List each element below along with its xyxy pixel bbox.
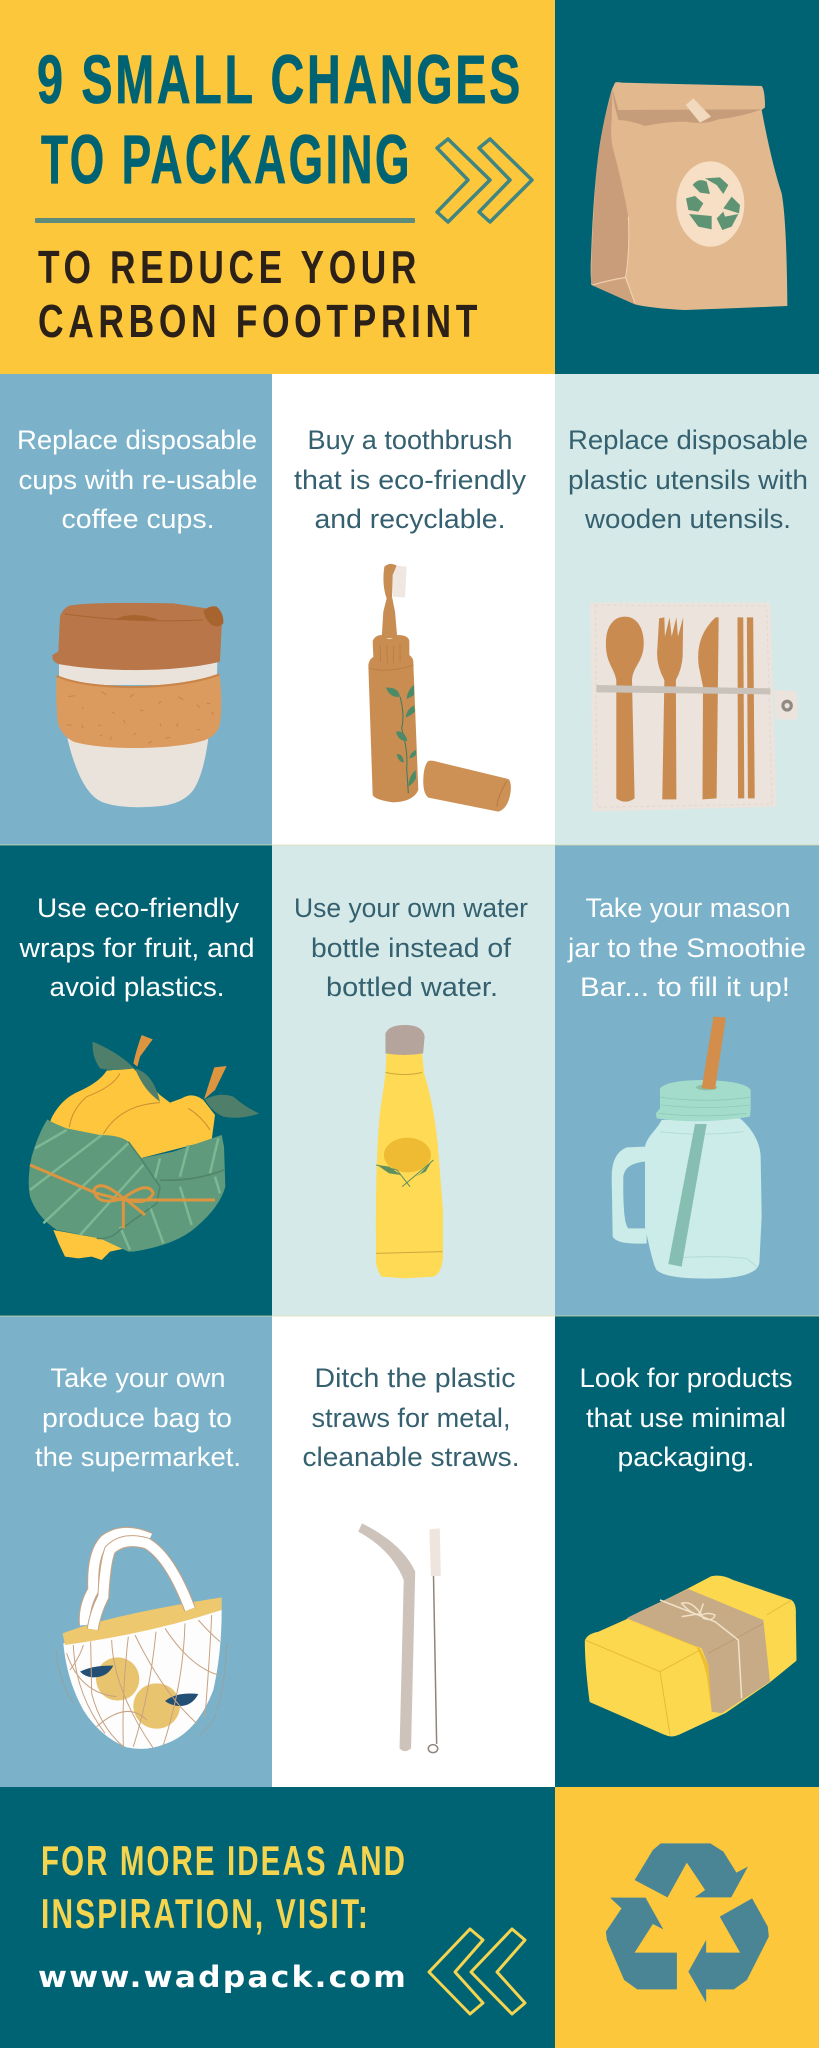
text: bottle instead of bbox=[311, 933, 512, 963]
text: jar: Take your mason bbox=[586, 893, 790, 923]
subtitle: CARBON FOOTPRINT bbox=[38, 295, 482, 347]
title: TO PACKAGING bbox=[41, 121, 412, 198]
text: cups: Replace disposable bbox=[17, 425, 257, 455]
panel: straws bbox=[272, 1316, 555, 1787]
panel: header teal bbox=[555, 0, 819, 374]
panel: produce bag bbox=[0, 1316, 272, 1787]
text: packaging. bbox=[618, 1442, 754, 1472]
text: the supermarket. bbox=[35, 1442, 241, 1472]
text: produce bag to bbox=[42, 1403, 232, 1433]
panel: mason jar bbox=[555, 845, 819, 1316]
footer link: www.wadpack.com bbox=[38, 1960, 408, 1994]
panel: water bottle bbox=[272, 845, 555, 1316]
text: produce bag: Take your own bbox=[50, 1363, 226, 1393]
icon: coffee cup bbox=[52, 603, 223, 807]
text: cups with re-usable bbox=[18, 465, 258, 495]
icon: packaged soap bbox=[585, 1577, 795, 1735]
icon: water bottle bbox=[376, 1025, 443, 1278]
text: minimal packaging: Look for products bbox=[580, 1363, 792, 1393]
icon: metal straw and brush bbox=[358, 1523, 441, 1753]
title rule bbox=[35, 218, 415, 223]
text: wooden utensils. bbox=[584, 504, 791, 534]
icon: wooden utensils bbox=[590, 603, 798, 812]
icon: toothbrush bbox=[368, 564, 511, 812]
icon: paper bag bbox=[591, 82, 787, 310]
footer text: FOR MORE IDEAS AND bbox=[41, 1837, 407, 1884]
text: bottle: Use your own water bbox=[294, 893, 528, 923]
text: straws: Ditch the plastic bbox=[314, 1363, 516, 1393]
arrow: header chevrons bbox=[437, 139, 532, 222]
footer text bbox=[41, 1837, 407, 1937]
subtitle bbox=[38, 241, 482, 347]
panel: minimal packaging bbox=[555, 1316, 819, 1787]
title bbox=[37, 41, 523, 198]
text: wraps for fruit, and bbox=[18, 933, 254, 963]
panel: footer yellow bbox=[555, 1787, 819, 2048]
panel: wraps bbox=[0, 845, 272, 1316]
text: straws for metal, bbox=[312, 1403, 510, 1433]
panel: toothbrush bbox=[272, 374, 555, 845]
panel: cups bbox=[0, 374, 272, 845]
footer text: INSPIRATION, VISIT: bbox=[41, 1890, 370, 1937]
text: wraps: Use eco-friendly bbox=[37, 893, 240, 923]
title: 9 SMALL CHANGES bbox=[37, 41, 523, 118]
text: toothbrush: Buy a toothbrush bbox=[308, 425, 512, 455]
panel: utensils bbox=[555, 374, 819, 845]
text: cleanable straws. bbox=[302, 1442, 520, 1472]
icon: produce net bag bbox=[56, 1533, 227, 1749]
text: that is eco-friendly bbox=[294, 465, 527, 495]
text: Bar... to fill it up! bbox=[580, 972, 790, 1002]
text: jar to the Smoothie bbox=[567, 933, 806, 963]
text: and recyclable. bbox=[314, 504, 506, 534]
text: plastic utensils with bbox=[568, 465, 808, 495]
panel: footer teal bbox=[0, 1787, 555, 2048]
icon: mason jar bbox=[612, 1017, 762, 1279]
text: bottled water. bbox=[326, 972, 498, 1002]
icon: wrapped fruit bbox=[29, 1035, 259, 1260]
text: coffee cups. bbox=[62, 504, 214, 534]
arrow: footer chevrons bbox=[429, 1929, 525, 2014]
icon: recycle symbol bbox=[606, 1843, 769, 2003]
text: utensils: Replace disposable bbox=[568, 425, 808, 455]
text: avoid plastics. bbox=[50, 972, 224, 1002]
panel: header yellow bbox=[0, 0, 555, 374]
text: that use minimal bbox=[586, 1403, 786, 1433]
subtitle: TO REDUCE YOUR bbox=[38, 241, 421, 293]
